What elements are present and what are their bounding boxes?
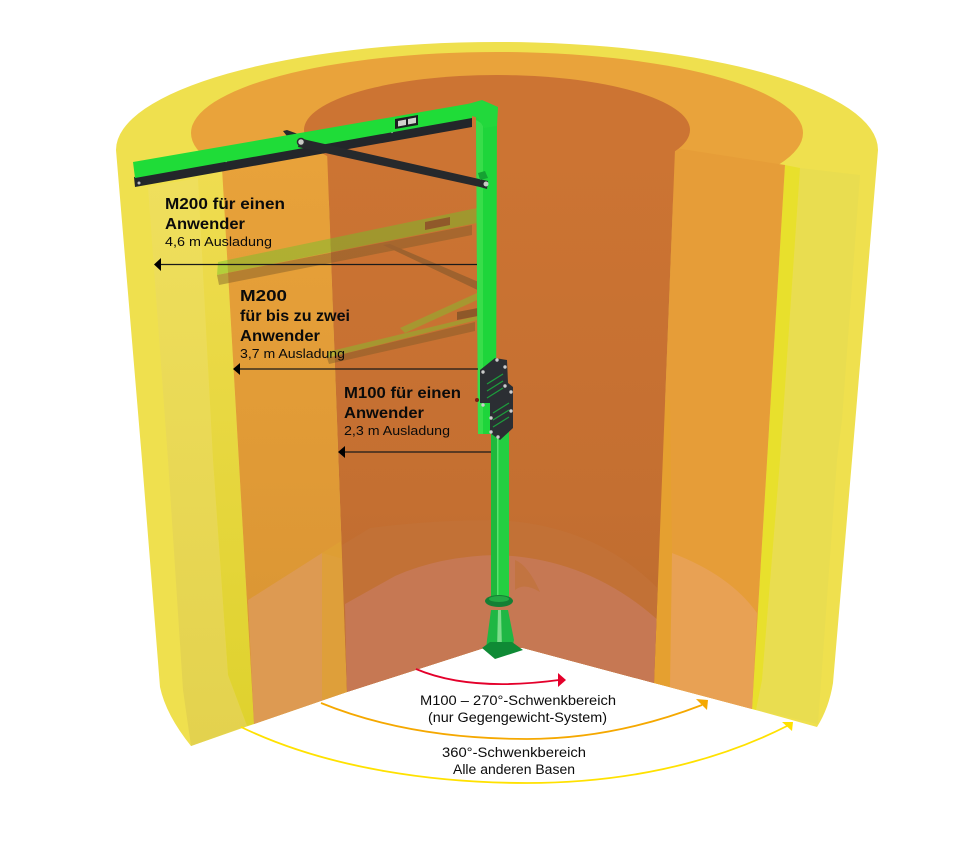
- column: lower: [491, 430, 509, 600]
- caption: M100 270 degree range: (nur Gegengewicht-System): [428, 710, 607, 725]
- ghost arm: M200 for two users, 3.7 m: [217, 208, 488, 294]
- zone: middle orange cylinder: [191, 52, 803, 724]
- arc arrow: orange: [321, 699, 708, 739]
- label: M100 one user: [344, 385, 461, 438]
- label: M100 one user: 2,3 m Ausladung: [344, 423, 450, 438]
- brace: [298, 138, 488, 189]
- label: M200 one user: 4,6 m Ausladung: [165, 234, 272, 249]
- mounting bracket: [475, 358, 513, 440]
- label: M200 up to two users: 3,7 m Ausladung: [240, 346, 345, 361]
- arrow: 4.6 m reach: [154, 258, 477, 271]
- column base: [482, 595, 523, 659]
- column: upper: [476, 107, 497, 434]
- cylinder: swing range zones: [116, 42, 878, 746]
- label: M100 one user: Anwender: [344, 405, 424, 422]
- arc arrow: yellow 360 degrees: [241, 722, 793, 783]
- caption: 360 degree range: 360°-Schwenkbereich: [442, 745, 586, 760]
- beam label plate: [395, 115, 418, 129]
- elbow: [468, 100, 498, 128]
- label: M100 one user: M100 für einen: [344, 385, 461, 402]
- beam: green: [133, 103, 473, 178]
- zone: outer yellow 360 degree cylinder: [116, 42, 878, 746]
- label: M200 up to two users: für bis zu zwei: [240, 308, 350, 325]
- caption: 360 degree range: Alle anderen Basen: [453, 762, 575, 777]
- jib arm and column: M200 for one user, 4.6 m: [133, 100, 523, 659]
- label: M200 one user: Anwender: [165, 216, 245, 233]
- caption: 360 degree range: [442, 745, 586, 777]
- arrow: 2.3 m reach: [338, 446, 491, 458]
- label: M200 up to two users: Anwender: [240, 328, 320, 345]
- beam: black rail: [134, 117, 472, 187]
- label: M200 up to two users: M200: [240, 288, 287, 305]
- ghost arm: M100 for one user, 2.3 m: [327, 293, 478, 364]
- brace: hidden tip behind beam: [283, 130, 298, 140]
- caption: M100 270 degree range: [420, 693, 616, 725]
- arc arrow: red 270 degrees: [416, 669, 566, 687]
- caption: M100 270 degree range: M100 – 270°-Schwenkbereich: [420, 693, 616, 708]
- arrow: 3.7 m reach: [233, 363, 478, 375]
- label: M200 up to two users: [240, 288, 350, 361]
- zone: inner dark orange cylinder: [304, 75, 690, 700]
- label: M200 one user: [165, 196, 285, 249]
- label: M200 one user: M200 für einen: [165, 196, 285, 213]
